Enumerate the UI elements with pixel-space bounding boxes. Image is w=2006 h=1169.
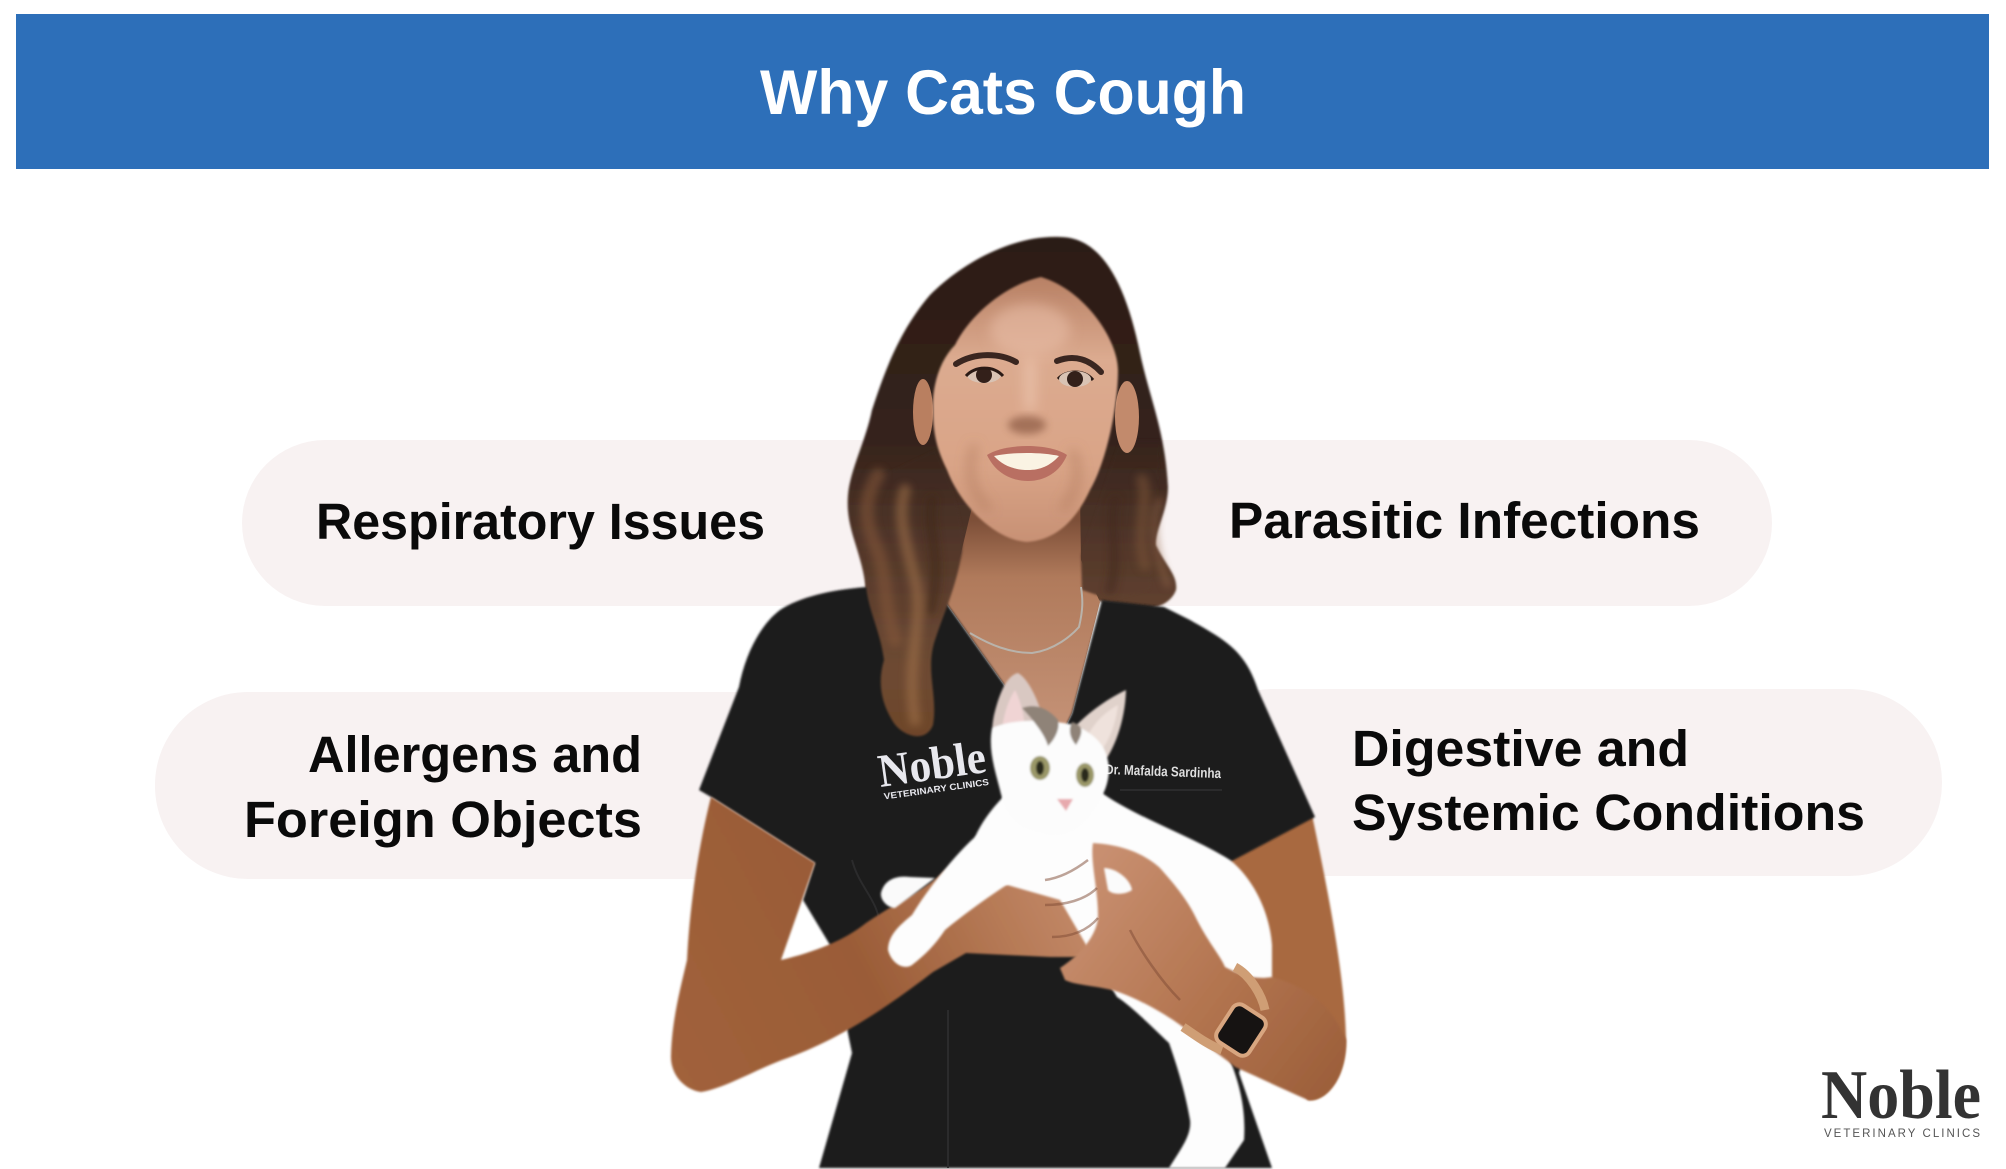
scrub seams	[852, 790, 1222, 1168]
watch	[1183, 967, 1269, 1059]
right ear	[1072, 690, 1126, 770]
pill: allergens and foreign objects: Foreign Objects	[244, 791, 642, 848]
long front hair curl	[866, 450, 962, 736]
hair back	[848, 237, 1176, 608]
pill: respiratory issues	[242, 440, 942, 606]
neck and chest	[942, 495, 1100, 770]
logo: VETERINARY CLINICS	[1824, 1128, 1980, 1140]
pill: digestive and systemic conditions: Digestive and	[1352, 720, 1689, 777]
title banner	[16, 14, 1989, 169]
pill: parasitic infections: Parasitic Infections	[1229, 492, 1700, 549]
right forearm and hand	[1060, 843, 1346, 1100]
kitten body and tail	[975, 790, 1272, 1168]
upper right arm	[1225, 815, 1346, 1100]
hair strands	[867, 475, 1168, 720]
face	[913, 277, 1139, 542]
ears	[913, 379, 933, 445]
nose shadow	[1008, 416, 1046, 434]
eyes	[967, 367, 1001, 383]
logo: Noble	[1821, 1057, 1981, 1134]
tabby patch	[1022, 706, 1059, 746]
head shape	[991, 721, 1109, 835]
pill: parasitic infections	[1080, 440, 1772, 606]
left ear	[992, 673, 1045, 760]
pill: respiratory issues: Respiratory Issues	[316, 493, 765, 550]
jaw and forehead	[933, 277, 1118, 542]
necklace	[970, 587, 1082, 653]
shirt logo: VETERINARY CLINICS	[883, 777, 990, 802]
mouth	[987, 446, 1067, 481]
finger shadows	[1045, 860, 1180, 1000]
pill: digestive and systemic conditions	[1180, 689, 1942, 876]
cheek and nose shading	[970, 304, 1077, 510]
eyebrows	[956, 355, 1101, 372]
veterinarian holding a white kitten	[671, 237, 1346, 1168]
right front hair	[1081, 440, 1160, 600]
title: Why Cats Cough	[760, 58, 1246, 128]
kitten head	[991, 673, 1126, 835]
kitten front leg and back paw	[881, 820, 1062, 967]
kitten nose	[1057, 799, 1073, 811]
gap of white fur between hands	[1104, 868, 1132, 894]
pill: digestive and systemic conditions: Systemic Conditions	[1352, 784, 1865, 841]
pill: allergens and foreign objects: Allergens and	[308, 726, 642, 783]
left arm	[671, 797, 1112, 1092]
kitten eyes	[1030, 756, 1050, 780]
name embroidery: Dr. Mafalda Sardinha	[1105, 761, 1222, 781]
scrub top	[699, 587, 1315, 1168]
pill: allergens and foreign objects	[155, 692, 855, 879]
shirt logo: Noble	[875, 731, 989, 798]
